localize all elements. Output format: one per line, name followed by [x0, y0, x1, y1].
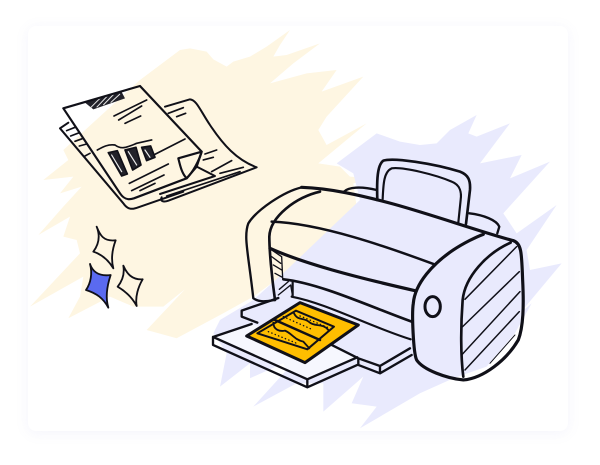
page text lines and chart	[97, 100, 185, 191]
paper tray	[213, 298, 412, 387]
icon: power button	[425, 297, 440, 317]
brush stroke: blue background	[213, 115, 562, 428]
middle page	[60, 123, 215, 209]
documents	[60, 86, 257, 209]
icon: document header block	[85, 92, 125, 109]
icon: blue sparkle	[86, 264, 111, 308]
back page	[161, 99, 257, 201]
icon: outlined sparkle top	[93, 227, 116, 268]
front page	[63, 86, 202, 199]
paper support	[344, 160, 499, 233]
sparkles	[86, 227, 143, 308]
printed photo	[247, 303, 358, 363]
printer side panel	[413, 234, 523, 380]
brush stroke: yellow background	[30, 30, 373, 338]
panel: white card	[28, 26, 568, 431]
icon: outlined sparkle right	[118, 266, 143, 306]
printer body	[246, 187, 513, 339]
printer	[213, 160, 523, 387]
